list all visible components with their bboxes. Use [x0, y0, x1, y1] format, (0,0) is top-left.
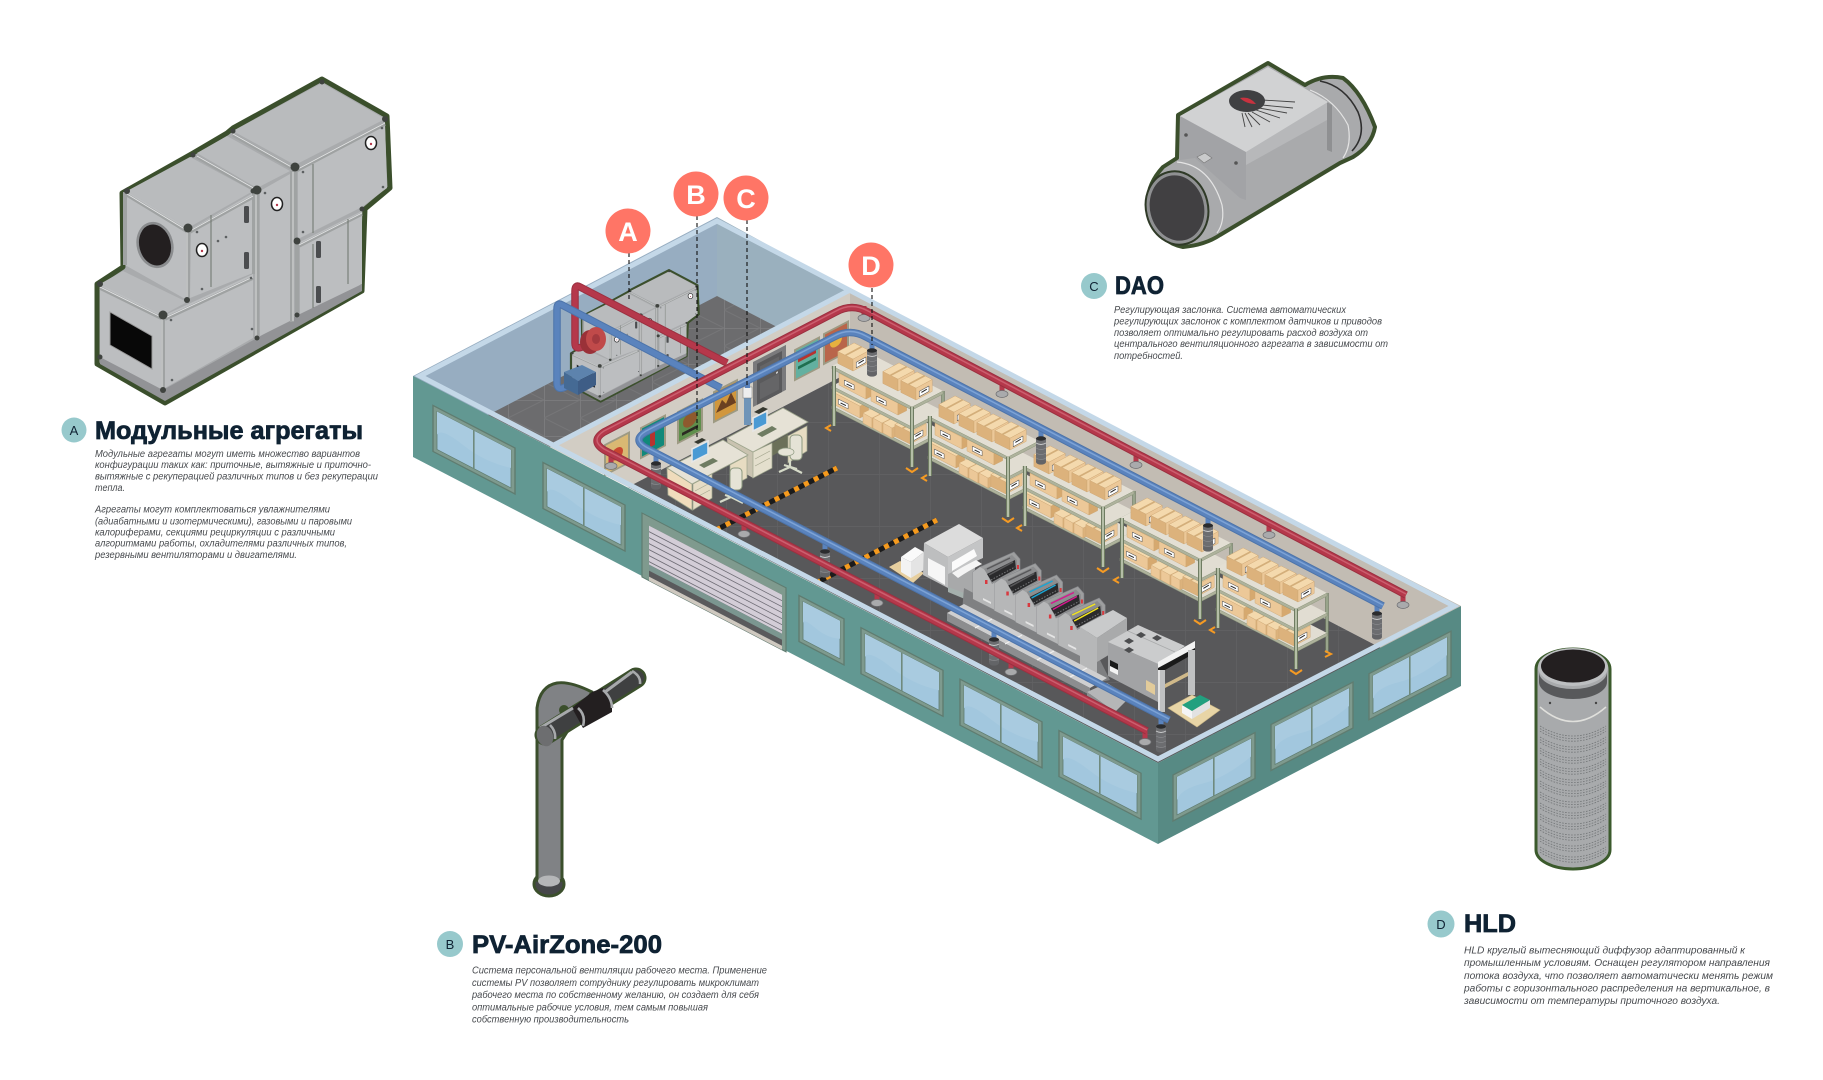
- section B text: рабочего места по собственному желанию, он создает для себя: [471, 989, 760, 1001]
- section B text: системы PV позволяет сотруднику регулировать микроклимат: [472, 978, 759, 989]
- section D text: промышленным условиям. Оснащен регулятором направления: [1464, 958, 1771, 969]
- mechanical room walls and floor: [413, 217, 850, 447]
- hall back walls and floor: [550, 292, 1461, 763]
- front walls with windows and roller door: [413, 376, 1461, 844]
- section D text: HLD: [1464, 910, 1516, 938]
- printing press: [889, 524, 1220, 727]
- wall posters: [605, 322, 848, 475]
- section C text: DAO: [1115, 272, 1164, 300]
- delivery unit: [1108, 625, 1195, 712]
- product: DAO regulating damper: [1138, 63, 1375, 251]
- office door: [753, 345, 786, 407]
- mechanical room ducts and fan: [557, 286, 727, 395]
- marker D: D: [861, 251, 881, 281]
- diffusers and ceiling outlets: [605, 306, 1409, 753]
- feeder unit: [923, 524, 983, 602]
- section B text: Система персональной вентиляции рабочего места. Применение: [472, 964, 767, 976]
- marker B: B: [686, 180, 706, 210]
- marker B: [674, 172, 718, 440]
- section A text: Агрегаты могут комплектоваться увлажнителями: [94, 505, 330, 516]
- desk B: [727, 407, 808, 478]
- section B text: собственную производительность: [472, 1014, 629, 1026]
- perforation rows: [1540, 726, 1606, 862]
- section A text: тепла.: [95, 483, 125, 494]
- section B text: [437, 931, 767, 1026]
- section B text: оптимальные рабочие условия, тем самым повышая: [472, 1002, 709, 1014]
- section C text: Регулирующая заслонка. Система автоматических: [1114, 305, 1347, 316]
- section C text: позволяет оптимально регулировать расход воздуха от: [1114, 328, 1368, 339]
- section A text: A: [70, 423, 79, 438]
- section C text: центрального вентиляционного агрегата в зависимости от: [1114, 339, 1388, 350]
- section C text: [1081, 272, 1388, 362]
- section A text: вытяжные с рекуперацией различных типов и без рекуперации: [95, 470, 378, 482]
- marker C: [724, 176, 768, 386]
- section D text: HLD круглый вытесняющий диффузор адаптированный к: [1464, 944, 1746, 956]
- section A text: алгоритмами работы, охладителями различных типов,: [95, 538, 347, 550]
- section D text: работы с горизонтального распределения на вертикальное, в: [1463, 982, 1770, 994]
- section A text: конфигурации таких как: приточные, вытяжные и приточно-: [95, 459, 372, 471]
- section C text: регулирующих заслонок с комплектом датчиков и приводов: [1113, 316, 1382, 328]
- section D text: зависимости от температуры приточного воздуха.: [1463, 996, 1720, 1007]
- blue return duct: [639, 332, 1383, 720]
- section C text: потребностей.: [1114, 350, 1183, 362]
- red supply duct: [597, 306, 1406, 731]
- paper pallet at feeder: [889, 547, 924, 583]
- extension unit: [1080, 610, 1127, 680]
- damper dial: [1229, 90, 1295, 127]
- personal ventilation riser at wall: [743, 380, 752, 425]
- section C text: C: [1089, 279, 1099, 294]
- roof edge rim: [420, 221, 1454, 759]
- feed walkway: [947, 604, 1130, 717]
- section A text: калориферами, секциями рециркуляции с различными: [95, 526, 335, 538]
- desk A: [667, 438, 748, 510]
- section A text: резервными вентиляторами и двигателями.: [94, 550, 297, 561]
- product: HLD round diffuser: [1536, 648, 1610, 869]
- section D text: D: [1436, 917, 1446, 932]
- storage shelves with boxes: [826, 343, 1331, 674]
- section A text: (адиабатными и изотермическими), газовыми и паровыми: [95, 515, 352, 527]
- marker C: C: [736, 184, 756, 214]
- section D text: потока воздуха, что позволяет автоматически менять режим: [1464, 971, 1773, 982]
- office desks: [667, 407, 808, 510]
- floor hazard stripes: [716, 468, 937, 583]
- roller door: [642, 513, 786, 652]
- product: modular air handling unit: [97, 79, 390, 403]
- section A text: Модульные агрегаты: [95, 417, 363, 445]
- section A text: Модульные агрегаты могут иметь множество вариантов: [95, 449, 360, 460]
- mini air handling unit in mechanical room: [571, 270, 699, 402]
- marker A: [606, 208, 650, 302]
- section B text: PV-AirZone-200: [472, 931, 662, 959]
- section D text: [1428, 910, 1773, 1007]
- marker A: A: [618, 217, 638, 247]
- product: PV-AirZone-200 personal ventilation: [534, 671, 640, 896]
- marker D: [848, 242, 894, 345]
- press base: [962, 588, 1110, 684]
- section A text: [62, 417, 378, 561]
- finished pallet: [1168, 695, 1220, 727]
- building: [413, 217, 1461, 844]
- section B text: B: [446, 937, 454, 952]
